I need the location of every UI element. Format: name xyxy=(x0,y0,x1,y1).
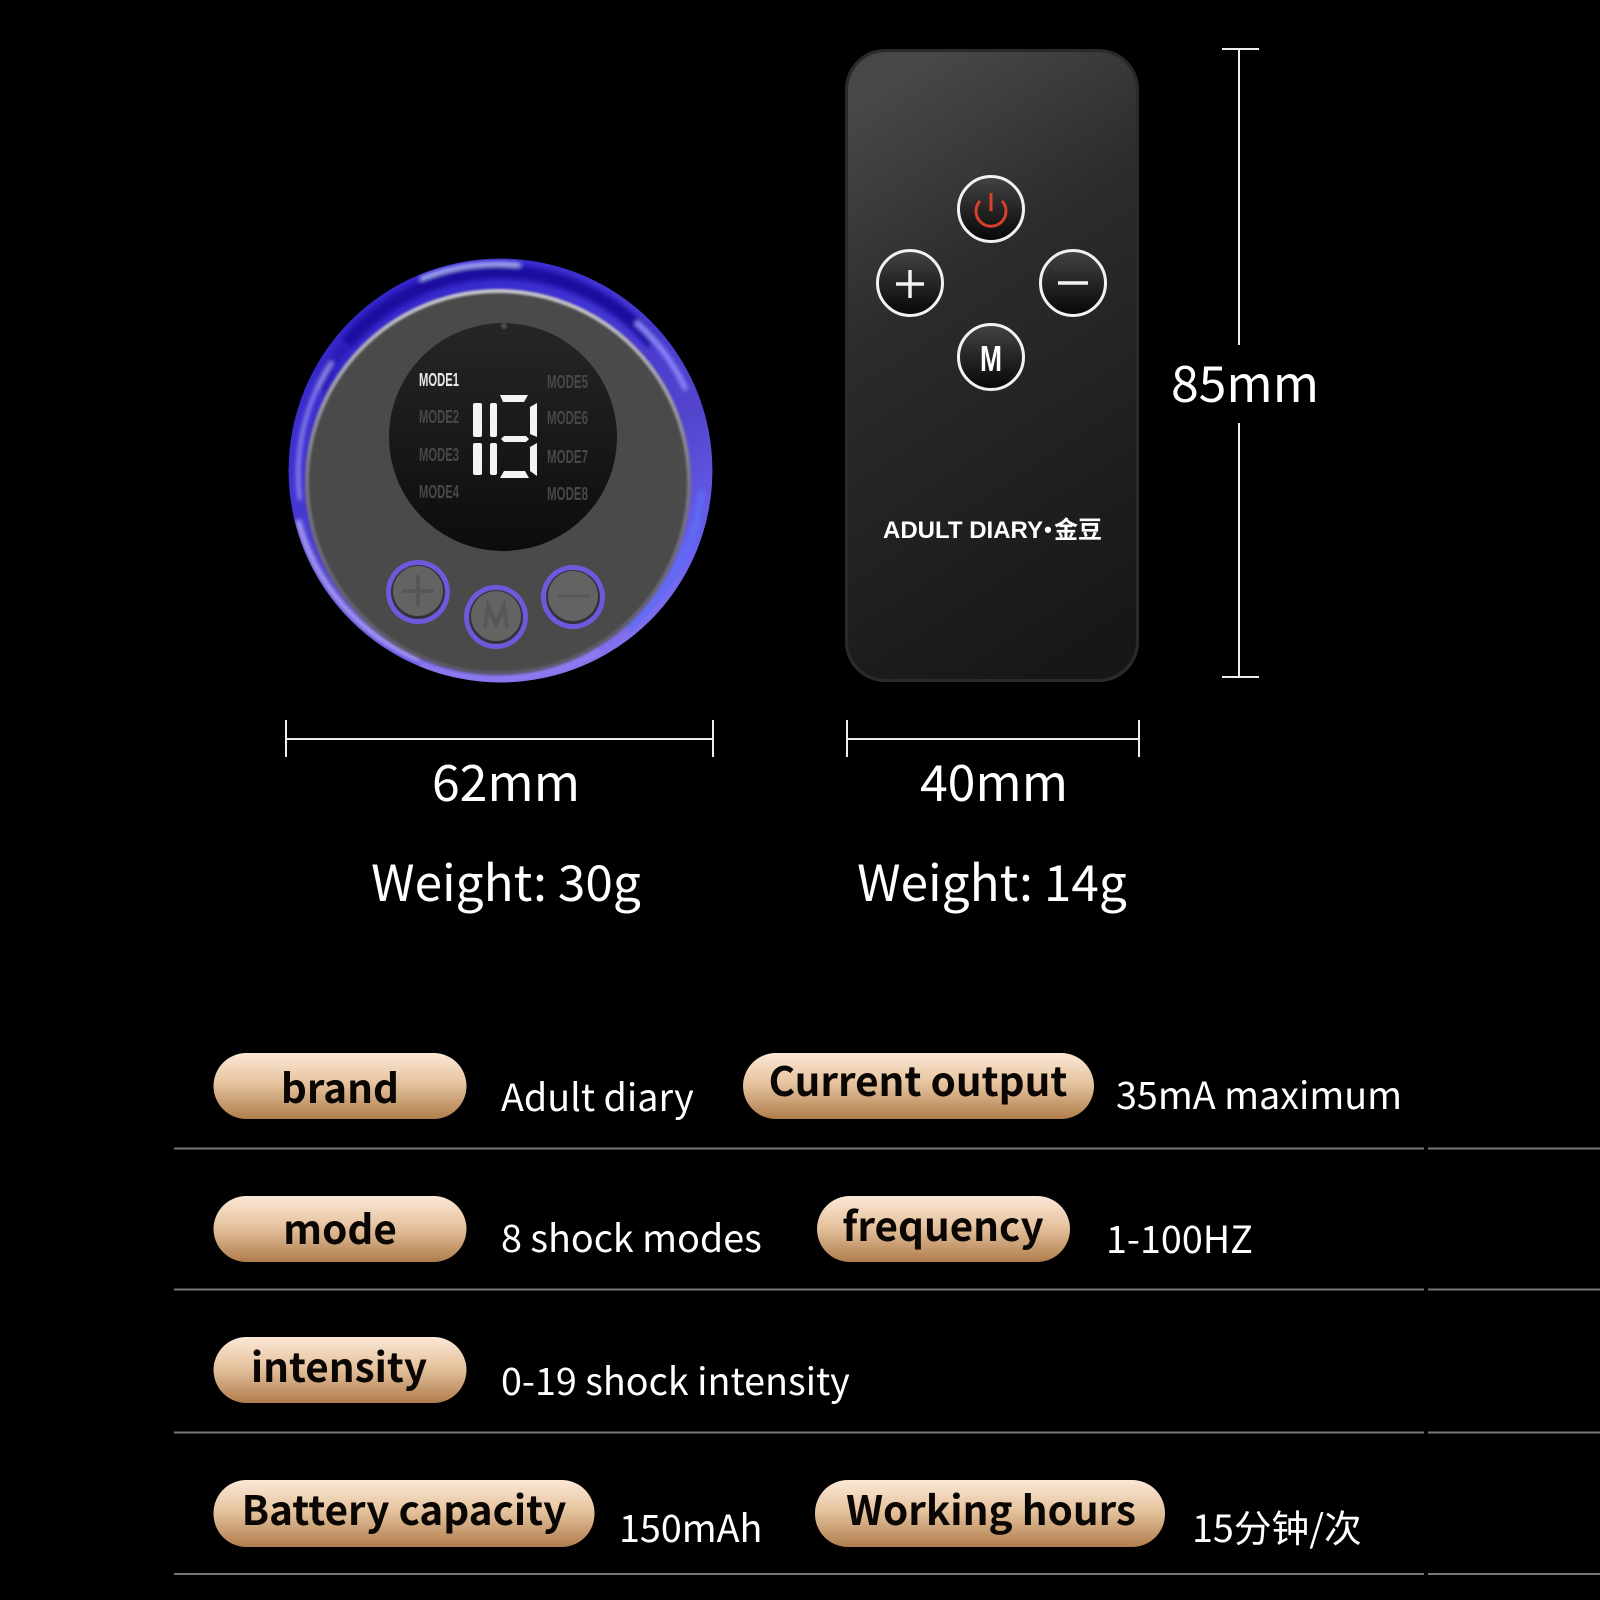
spec: current output: 35mA maximum xyxy=(1116,1065,1402,1120)
button plus xyxy=(386,560,450,624)
mode labels xyxy=(419,370,588,504)
label 85mm: 85mm xyxy=(1171,345,1319,417)
spec: intensity xyxy=(214,1335,850,1406)
spec: frequency: 1-100HZ xyxy=(1106,1209,1253,1264)
spec: working hours xyxy=(815,1478,1362,1553)
spec: battery capacity: 150mAh xyxy=(619,1498,762,1553)
M button: M xyxy=(980,338,1002,379)
remote brand xyxy=(883,510,1102,545)
spec: intensity: 0-19 shock intensity xyxy=(501,1351,850,1406)
mode labels: MODE4 xyxy=(419,482,459,502)
weight remote: Weight: 14g xyxy=(857,845,1127,916)
weight device: Weight: 30g xyxy=(371,845,641,916)
remote brand: 金豆 xyxy=(1054,510,1102,545)
spec: brand: brand xyxy=(281,1056,399,1115)
mode labels: MODE5 xyxy=(547,372,588,392)
mode labels: MODE6 xyxy=(547,408,588,428)
remote brand: ADULT DIARY xyxy=(883,517,1043,544)
spec: working hours: 15分钟/次 xyxy=(1192,1498,1362,1553)
mode labels: MODE2 xyxy=(419,407,459,427)
mode labels: MODE7 xyxy=(547,447,588,467)
dimension: device width xyxy=(286,720,713,757)
display xyxy=(389,323,617,551)
button M xyxy=(464,585,528,649)
device: remote control xyxy=(845,49,1139,682)
row dividers xyxy=(174,1148,1600,1574)
mode labels: MODE1 xyxy=(419,370,459,390)
spec: frequency: frequency xyxy=(842,1194,1044,1253)
mode labels: MODE3 xyxy=(419,445,459,465)
seven-segment digits xyxy=(473,395,537,478)
device: round massager xyxy=(288,258,712,682)
spec: intensity: intensity xyxy=(251,1335,427,1394)
spec: brand: Adult diary xyxy=(501,1067,694,1122)
spec: current output xyxy=(743,1049,1402,1120)
plus button xyxy=(878,250,942,316)
spec: mode xyxy=(214,1196,762,1263)
grey face xyxy=(308,292,688,672)
metallic ring xyxy=(288,258,712,682)
remote brand: • xyxy=(1044,517,1052,542)
M button xyxy=(958,324,1024,390)
dimension: remote width xyxy=(847,720,1139,757)
spec: brand xyxy=(214,1053,694,1122)
power button xyxy=(958,176,1024,242)
label 40mm: 40mm xyxy=(920,744,1068,816)
spec: frequency xyxy=(817,1194,1253,1264)
spec: battery capacity xyxy=(214,1478,762,1553)
spec: current output: Current output xyxy=(769,1049,1067,1108)
spec: mode: 8 shock modes xyxy=(501,1208,762,1263)
spec: battery capacity: Battery capacity xyxy=(242,1478,566,1537)
spec: mode: mode xyxy=(283,1197,397,1256)
label 62mm: 62mm xyxy=(432,744,580,816)
mode labels: MODE8 xyxy=(547,484,588,504)
button minus xyxy=(541,565,605,629)
dimension: remote height xyxy=(1222,49,1259,677)
minus button xyxy=(1040,250,1106,316)
spec: working hours: Working hours xyxy=(846,1478,1136,1537)
